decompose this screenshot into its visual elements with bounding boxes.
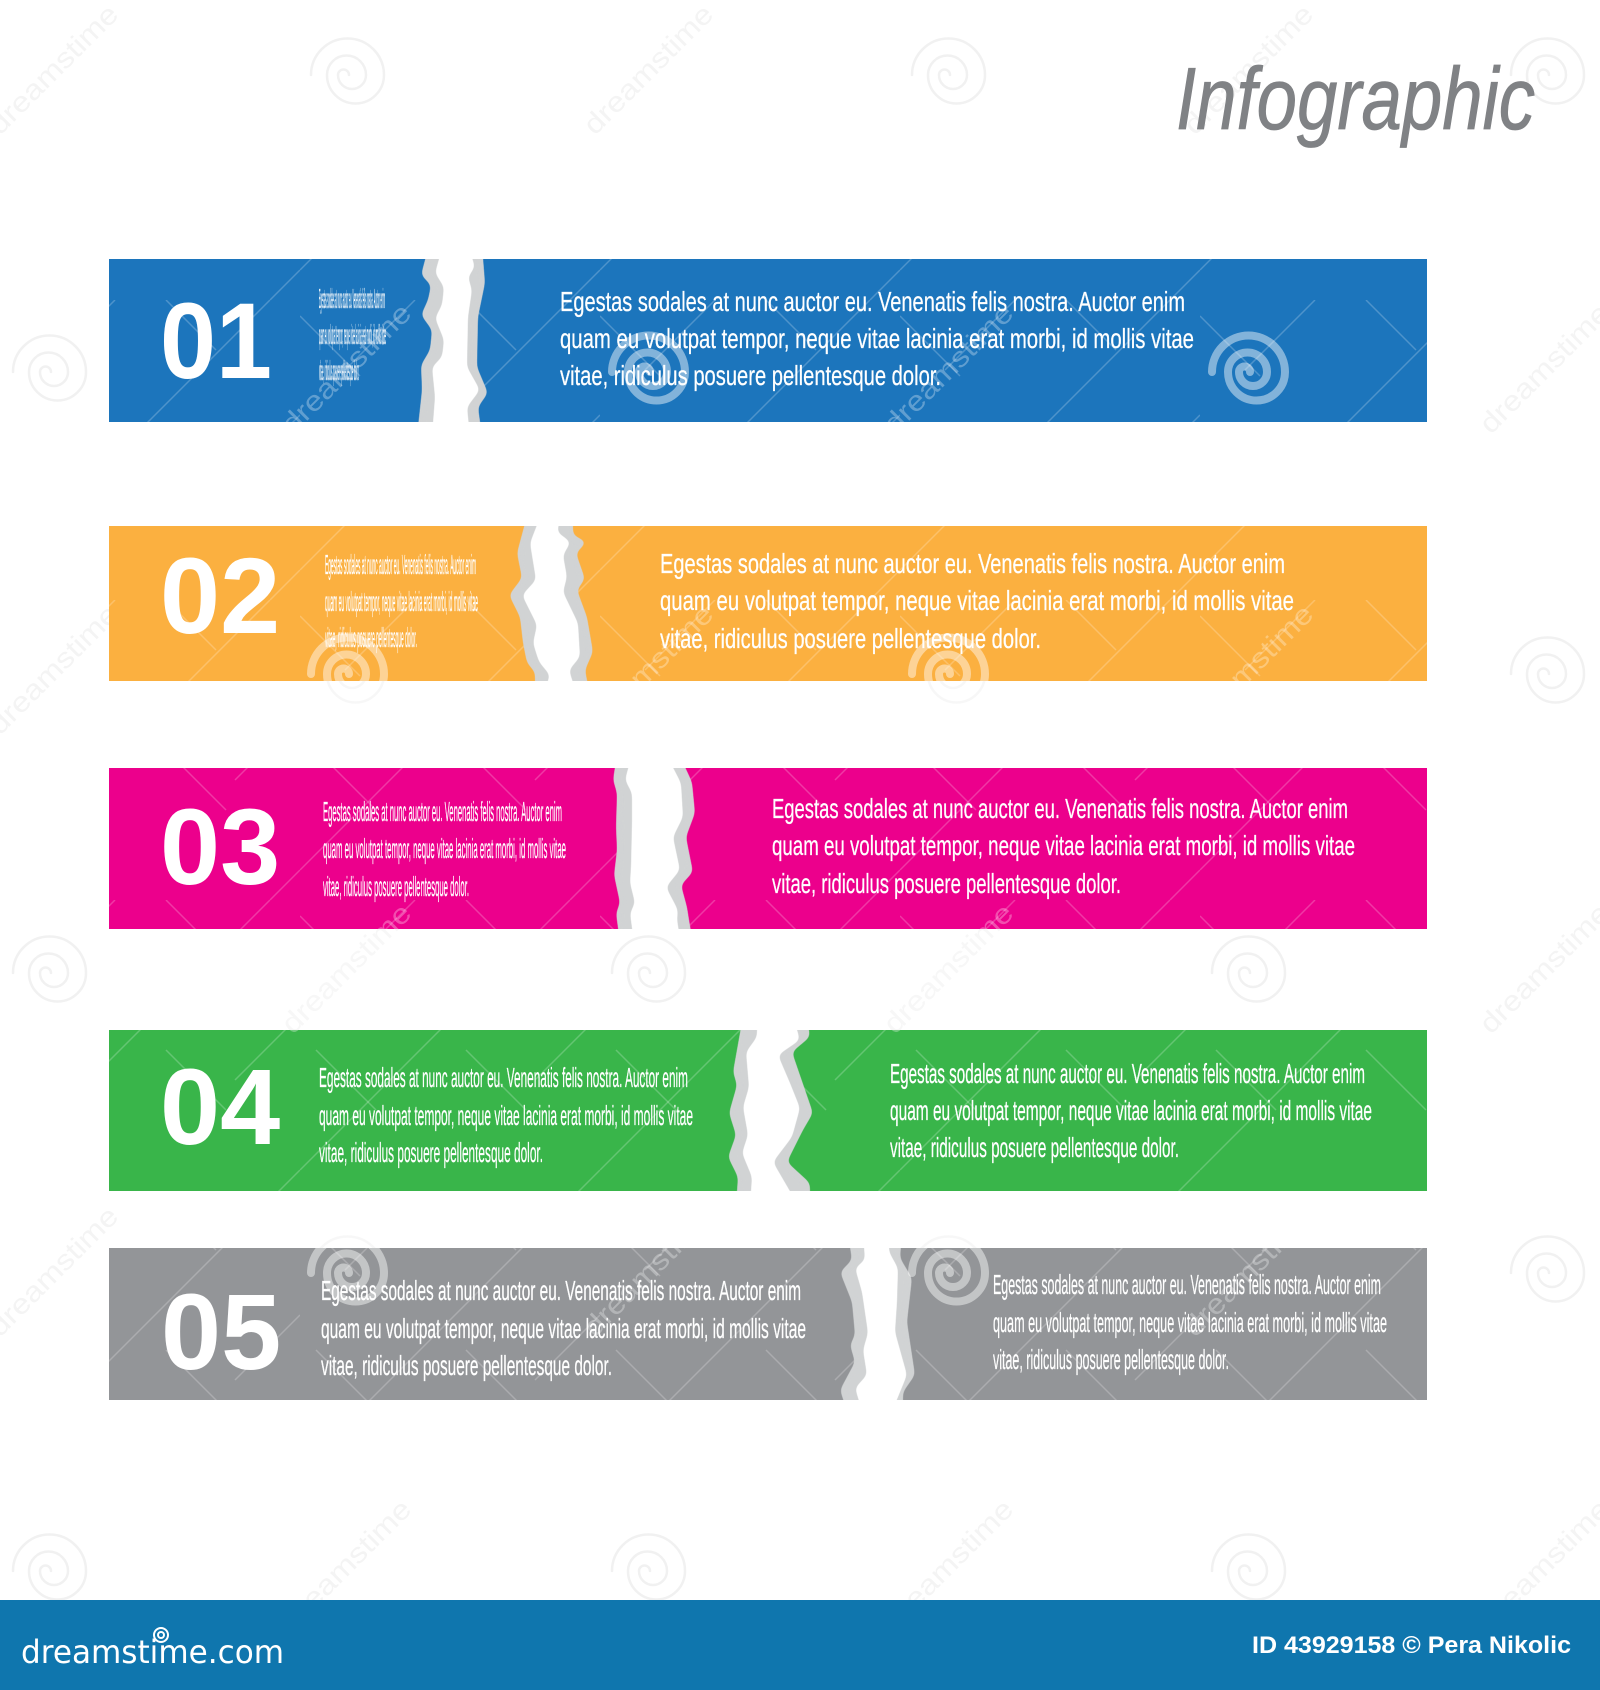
left text 05: quam eu volutpat tempor, neque vitae lacinia erat morbi, id mollis vitae bbox=[321, 1313, 806, 1344]
panel: row 01 blue bbox=[109, 259, 1427, 422]
footer logo: dreamstime.com bbox=[21, 1633, 284, 1671]
left text 05 bbox=[321, 1275, 806, 1381]
left text 01 bbox=[319, 283, 386, 386]
panel: row 04 green: quam eu volutpat tempor, neque vitae lacinia erat morbi, id mollis vitae bbox=[319, 1100, 693, 1131]
watermark layer on background: dreamstime bbox=[1473, 1493, 1600, 1635]
left text 02 bbox=[325, 549, 478, 653]
number 04: 04 bbox=[160, 1046, 280, 1167]
left text 04: vitae, ridiculus posuere pellentesque dolor. bbox=[319, 1137, 543, 1168]
watermark overlay on bars: dreamstime bbox=[577, 598, 719, 740]
panel: row 04 green: Egestas sodales at nunc auctor eu. Venenatis felis nostra. Auctor enim bbox=[319, 1062, 688, 1093]
right text 02 bbox=[660, 548, 1294, 654]
number 03: 03 bbox=[160, 786, 280, 907]
left text 05: Egestas sodales at nunc auctor eu. Venenatis felis nostra. Auctor enim bbox=[321, 1275, 801, 1306]
right text 04: vitae, ridiculus posuere pellentesque dolor. bbox=[890, 1132, 1179, 1163]
panel: row 02 orange bbox=[109, 526, 1427, 681]
watermark overlay on bars: dreamstime bbox=[1177, 598, 1319, 740]
watermark layer on background: dreamstime bbox=[877, 897, 1019, 1039]
watermark layer on background: dreamstime bbox=[577, 0, 719, 140]
left text 04 bbox=[319, 1062, 693, 1168]
right text 01: quam eu volutpat tempor, neque vitae lacinia erat morbi, id mollis vitae bbox=[560, 323, 1194, 354]
watermark overlay on bars: dreamstime bbox=[275, 897, 417, 1039]
watermark overlay on bars bbox=[275, 297, 1319, 1342]
right text 04 bbox=[890, 1058, 1372, 1163]
footer credit: ID 43929158 © Pera Nikolic bbox=[1252, 1632, 1571, 1659]
torn gap 02 bbox=[510, 526, 592, 681]
right text 05: vitae, ridiculus posuere pellentesque dolor. bbox=[993, 1344, 1229, 1375]
panel: row 01 blue: quam eu volutpat tempor, neque vitae lacinia erat morbi, id mollis vitae bbox=[319, 319, 386, 350]
panel: row 03 magenta bbox=[109, 768, 1427, 929]
watermark layer on background: dreamstime bbox=[1473, 897, 1600, 1039]
right text 02: quam eu volutpat tempor, neque vitae lacinia erat morbi, id mollis vitae bbox=[660, 585, 1294, 616]
panel: row 03 magenta: vitae, ridiculus posuere pellentesque dolor. bbox=[323, 871, 469, 902]
icon: logo spiral bbox=[154, 1628, 168, 1642]
torn gap 01 bbox=[418, 259, 487, 422]
left text 05: vitae, ridiculus posuere pellentesque dolor. bbox=[321, 1350, 612, 1381]
panel: row 01 blue: Egestas sodales at nunc auctor eu. Venenatis felis nostra. Auctor enim bbox=[319, 283, 385, 314]
watermark layer on background: dreamstime bbox=[1177, 0, 1319, 140]
torn gap 03 bbox=[613, 768, 695, 929]
right text 01 bbox=[560, 286, 1194, 391]
watermark layer on background: dreamstime bbox=[1473, 297, 1600, 439]
watermark overlay on bars: dreamstime bbox=[877, 897, 1019, 1039]
panel: row 03 magenta: quam eu volutpat tempor, neque vitae lacinia erat morbi, id mollis vitae bbox=[323, 833, 566, 864]
watermark overlay on bars: dreamstime bbox=[275, 297, 417, 439]
panel: row 05 grey bbox=[109, 1248, 1427, 1400]
torn gap 05 bbox=[841, 1248, 914, 1400]
watermark layer on background: dreamstime bbox=[275, 1493, 417, 1635]
right text 03: vitae, ridiculus posuere pellentesque dolor. bbox=[772, 868, 1121, 899]
panel: row 02 orange: quam eu volutpat tempor, neque vitae lacinia erat morbi, id mollis vitae bbox=[325, 586, 478, 617]
title: Infographic bbox=[1176, 49, 1535, 148]
number 02: 02 bbox=[160, 535, 280, 656]
right text 05 bbox=[993, 1269, 1387, 1375]
right text 01: Egestas sodales at nunc auctor eu. Venenatis felis nostra. Auctor enim bbox=[560, 286, 1185, 317]
right text 01: vitae, ridiculus posuere pellentesque dolor. bbox=[560, 360, 941, 391]
watermark overlay on bars: dreamstime bbox=[877, 297, 1019, 439]
number 05: 05 bbox=[161, 1271, 281, 1392]
watermark layer on background: dreamstime bbox=[275, 897, 417, 1039]
panel: row 01 blue: vitae, ridiculus posuere pellentesque dolor. bbox=[319, 355, 359, 386]
right text 02: vitae, ridiculus posuere pellentesque dolor. bbox=[660, 623, 1041, 654]
number 01: 01 bbox=[160, 280, 272, 401]
torn gap 04 bbox=[728, 1030, 812, 1191]
panel: row 02 orange: Egestas sodales at nunc auctor eu. Venenatis felis nostra. Auctor enim bbox=[325, 549, 476, 580]
watermark overlay on bars: dreamstime bbox=[577, 1200, 719, 1342]
right text 02: Egestas sodales at nunc auctor eu. Venenatis felis nostra. Auctor enim bbox=[660, 548, 1285, 579]
footer bar bbox=[0, 1600, 1600, 1690]
watermark overlay on bars: dreamstime bbox=[1177, 1200, 1319, 1342]
panel: row 04 green bbox=[109, 1030, 1427, 1191]
panel: row 02 orange: vitae, ridiculus posuere pellentesque dolor. bbox=[325, 622, 417, 653]
right text 03 bbox=[772, 793, 1355, 899]
panel: row 03 magenta: Egestas sodales at nunc auctor eu. Venenatis felis nostra. Auctor enim bbox=[323, 796, 562, 827]
watermark layer on background: dreamstime bbox=[877, 1493, 1019, 1635]
left text 03 bbox=[323, 796, 566, 902]
